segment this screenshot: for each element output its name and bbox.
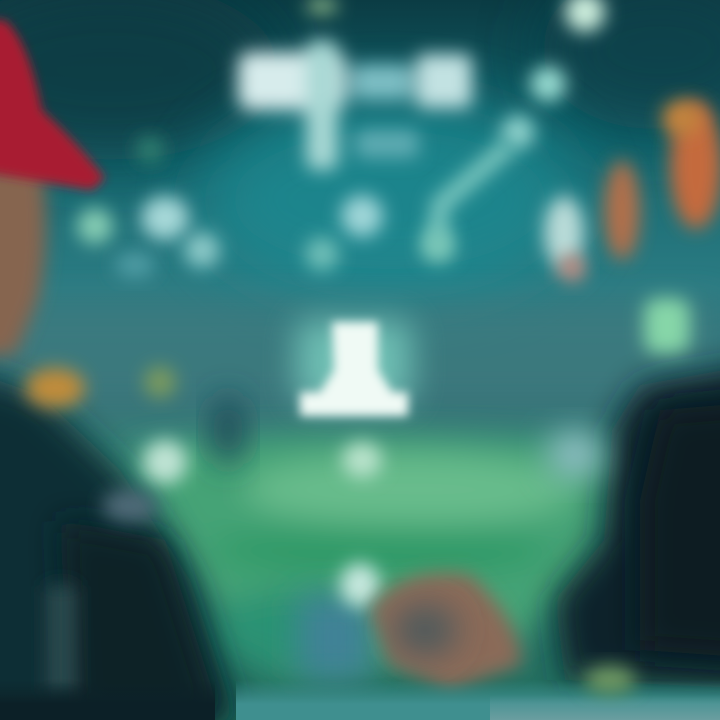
bottom edge	[236, 666, 720, 720]
flags and banners right	[544, 100, 720, 354]
trophy	[296, 320, 412, 478]
title glow	[238, 0, 472, 170]
left figure	[0, 20, 244, 720]
green pitch	[130, 438, 610, 680]
right figure	[547, 360, 720, 690]
hand and phone	[298, 563, 522, 690]
glowing dots and trend line	[77, 0, 605, 278]
